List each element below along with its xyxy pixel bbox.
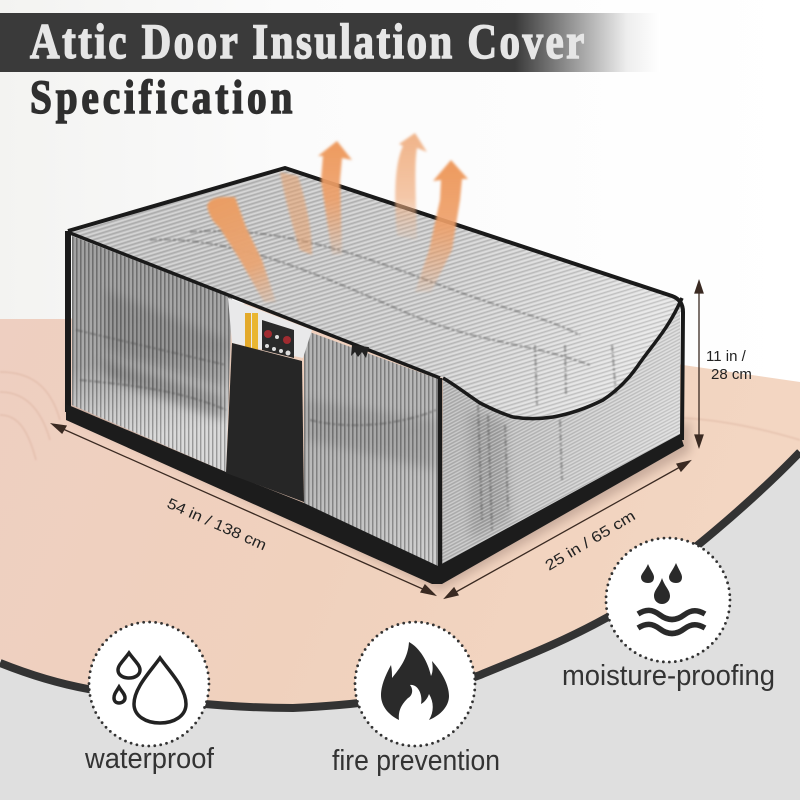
- icon: drops and waves: [641, 563, 682, 604]
- label: 54 in: 54 in / 138 cm: [164, 495, 269, 554]
- heat arrows over the box: [207, 133, 468, 302]
- heat arrow 3: [395, 133, 427, 240]
- heat arrow 2: [318, 141, 352, 255]
- heat arrow 4: [415, 160, 468, 292]
- binding edges: [68, 168, 683, 570]
- label: moisture-proofing: [562, 660, 775, 692]
- label: 25 in: 25 in / 65 cm: [542, 507, 638, 574]
- pocket contents: [228, 298, 312, 358]
- foil wrinkles: [76, 231, 616, 530]
- label: 11 in: 28 cm: [711, 366, 752, 383]
- title: Attic Door Insulation Cover: [30, 13, 584, 69]
- front face left: [72, 236, 232, 472]
- badge: moisture-proofing: [562, 538, 775, 692]
- insulation cover box: [66, 133, 684, 584]
- heat arrow 1: [207, 197, 276, 302]
- floor: [0, 300, 800, 705]
- badge circle: [606, 538, 730, 662]
- label: waterproof: [84, 743, 215, 775]
- box shadow: [70, 400, 690, 590]
- banner: [0, 13, 660, 72]
- bottom band: [66, 404, 684, 584]
- badge circle: [89, 622, 209, 746]
- zipper pull: [351, 345, 369, 358]
- front face right: [304, 330, 438, 568]
- badge: fire prevention: [332, 622, 500, 777]
- floor edge: [0, 452, 800, 708]
- lower grey area: [0, 455, 800, 800]
- subtitle: Specification: [30, 71, 292, 124]
- side face: [442, 305, 680, 566]
- badge circle: [355, 622, 475, 746]
- label: fire prevention: [332, 745, 500, 777]
- top face: [70, 168, 682, 418]
- heat arrow 5: [280, 172, 312, 255]
- icon: water drops: [114, 653, 186, 723]
- dimension: depth arrow: [445, 461, 690, 598]
- black pocket: [226, 343, 304, 502]
- icon: flame: [381, 642, 449, 720]
- label: 11 in: [706, 348, 752, 383]
- dimension: width arrow: [52, 424, 435, 595]
- label: 11 in: 11 in /: [706, 348, 747, 365]
- badge: waterproof: [84, 622, 215, 775]
- dimension: height arrow: [695, 281, 703, 447]
